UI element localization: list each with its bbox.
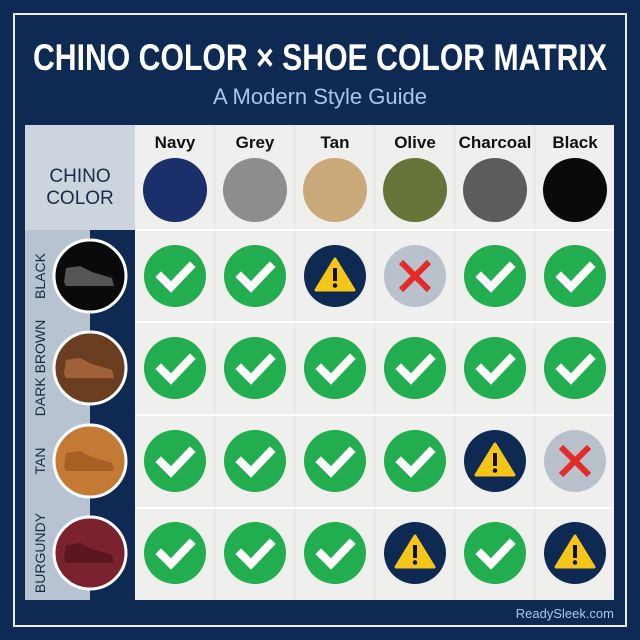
row labels: BURGUNDY <box>32 512 48 593</box>
column headers: Black <box>552 133 598 152</box>
footer credit: ReadySleek.com <box>516 606 614 621</box>
icons grid <box>144 245 606 584</box>
header: chino color <box>25 125 135 230</box>
subtitle: A Modern Style Guide <box>213 84 427 109</box>
row labels: DARK BROWN <box>32 320 48 416</box>
matrix <box>25 125 614 600</box>
column headers: Navy <box>155 133 196 152</box>
header: chino color: COLOR <box>46 188 114 209</box>
column headers: Charcoal <box>459 133 531 152</box>
row labels: TAN <box>32 448 48 474</box>
column headers <box>143 133 607 222</box>
column headers: Tan <box>321 133 349 152</box>
column headers: Olive <box>394 133 436 152</box>
row labels <box>25 230 135 600</box>
header: chino color: CHINO <box>49 166 111 187</box>
shoe icons <box>54 240 126 589</box>
row labels: BLACK <box>32 252 48 299</box>
column headers: Grey <box>236 133 275 152</box>
